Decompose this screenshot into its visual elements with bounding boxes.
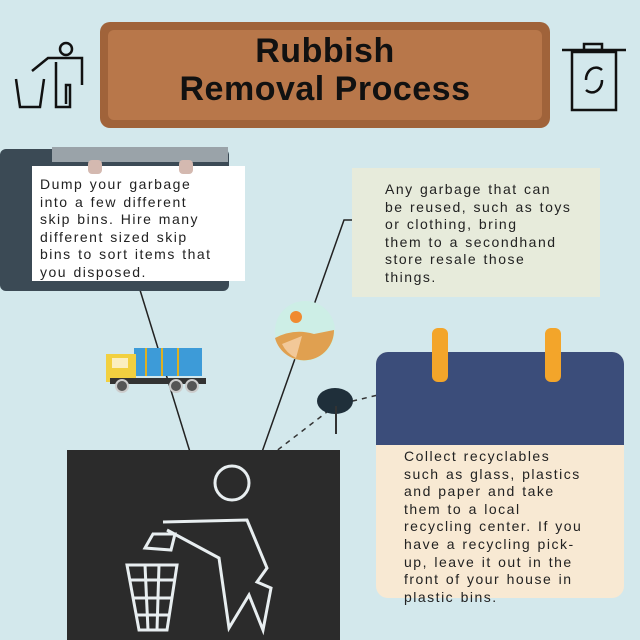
text: step 2 bbox=[385, 181, 571, 285]
text: step 3: such as glass, plastics bbox=[404, 466, 581, 482]
text: step 1: you disposed. bbox=[40, 264, 147, 280]
panel: calendar bbox=[376, 328, 624, 605]
icon: person throwing trash bbox=[14, 42, 84, 108]
text: step 3: and paper and take bbox=[404, 483, 555, 499]
chalkboard: litter symbol bbox=[67, 450, 340, 640]
text: step 2: Any garbage that can bbox=[385, 181, 551, 197]
text: step 3: front of your house in bbox=[404, 571, 573, 587]
panel: reuse note bbox=[352, 168, 600, 297]
title sign: Rubbish bbox=[255, 32, 395, 70]
text: step 3: them to a local bbox=[404, 501, 521, 517]
text: step 3: have a recycling pick- bbox=[404, 536, 575, 552]
text: step 1: different sized skip bbox=[40, 229, 188, 245]
icon: recycle bin bbox=[562, 42, 626, 112]
text: step 2: store resale those bbox=[385, 251, 525, 267]
text: step 2: them to a secondhand bbox=[385, 234, 557, 250]
text: step 3 bbox=[404, 448, 582, 605]
text: step 3: Collect recyclables bbox=[404, 448, 550, 464]
text: step 1: Dump your garbage bbox=[40, 176, 191, 192]
text: step 3: recycling center. If you bbox=[404, 518, 582, 534]
panel: clipboard bbox=[0, 147, 245, 291]
text: step 1: skip bins. Hire many bbox=[40, 211, 199, 227]
text: step 2: things. bbox=[385, 269, 437, 285]
text: step 1: into a few different bbox=[40, 194, 187, 210]
text: step 3: up, leave it out in the bbox=[404, 554, 573, 570]
text: step 1: bins to sort items that bbox=[40, 246, 212, 262]
icon: location circle bbox=[275, 302, 334, 360]
icon: pin bbox=[317, 388, 353, 434]
text: step 1 bbox=[40, 176, 212, 280]
title sign: Removal Process bbox=[180, 70, 470, 108]
icon: garbage truck bbox=[106, 348, 206, 393]
text: step 3: plastic bins. bbox=[404, 589, 498, 605]
title sign bbox=[100, 22, 550, 128]
text: step 2: or clothing, bring bbox=[385, 216, 518, 232]
text: step 2: be reused, such as toys bbox=[385, 199, 571, 215]
